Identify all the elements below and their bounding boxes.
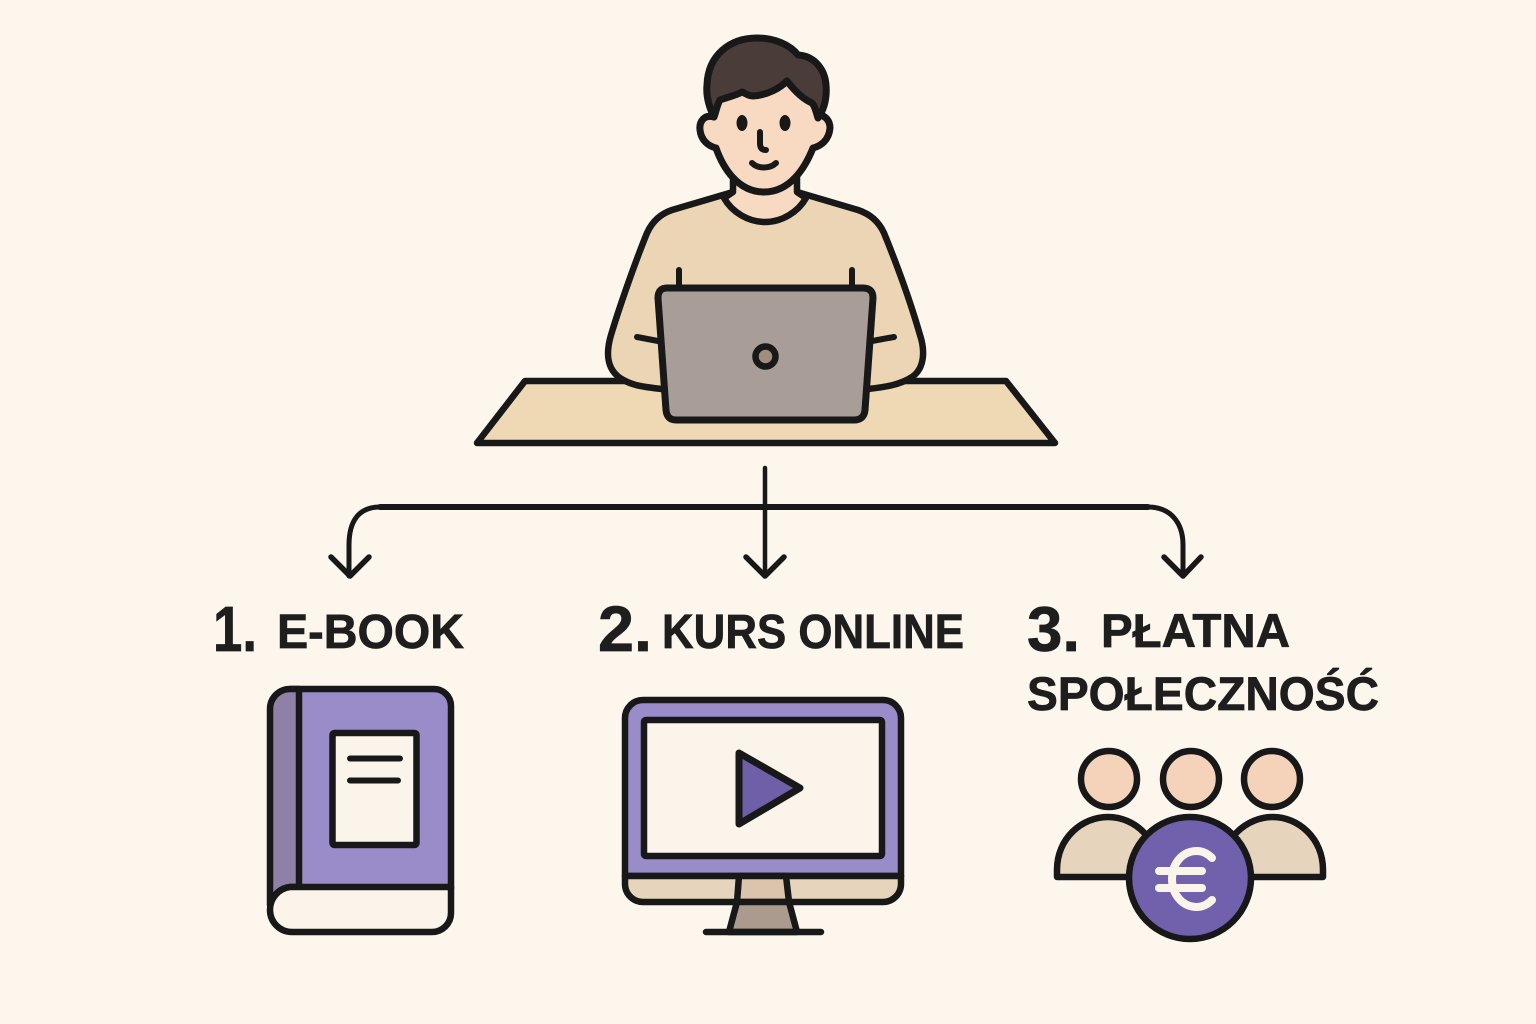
euro coin [1129,817,1251,939]
neck [724,178,806,222]
label e-book: E-BOOK [277,606,464,659]
monitor bezel [625,700,901,876]
cover label [332,733,416,845]
mouth [752,163,776,168]
arrowhead right [1164,557,1201,576]
laptop logo [756,346,776,366]
label spolecznosc: SPOŁECZNOŚĆ [1027,667,1379,720]
monitor neck [737,876,789,902]
base line [706,929,821,935]
arrowhead left [331,557,369,576]
laptop [658,288,873,420]
icon: monitor with video [625,700,901,932]
hair [707,38,826,118]
euro sign [1159,851,1212,907]
heading 3: platna spolecznosc [1027,595,1379,720]
head with ears [700,74,830,192]
eyes [736,115,790,131]
monitor chin [625,876,901,902]
label lines [350,758,400,780]
icon: book [270,689,451,932]
number 1: 1. [213,593,257,665]
horizontal connector [380,504,1148,510]
monitor base [729,902,797,932]
person right [1220,751,1323,877]
book cover [290,689,451,888]
play button [739,753,800,824]
torso with arms [608,192,923,389]
book pages [270,887,451,932]
arrowhead center [746,557,784,576]
branching arrows [331,468,1201,576]
central vertical arrow [763,468,767,576]
screen [644,720,882,856]
icon: paid community [1057,751,1323,939]
desk [477,381,1055,443]
person left [1057,751,1160,877]
book spine [270,689,299,905]
hands and arm marks [637,270,894,341]
heading 1: e-book [213,593,464,665]
label platna: PŁATNA [1101,604,1290,657]
number 3: 3. [1027,595,1080,665]
illustration: person at desk with laptop [477,38,1055,443]
number 2: 2. [598,593,652,665]
label kurs online: KURS ONLINE [662,606,964,659]
connector curved ends [349,507,1183,576]
heading 2: kurs online [598,593,964,665]
person center head [1163,751,1219,807]
nose [760,132,766,150]
